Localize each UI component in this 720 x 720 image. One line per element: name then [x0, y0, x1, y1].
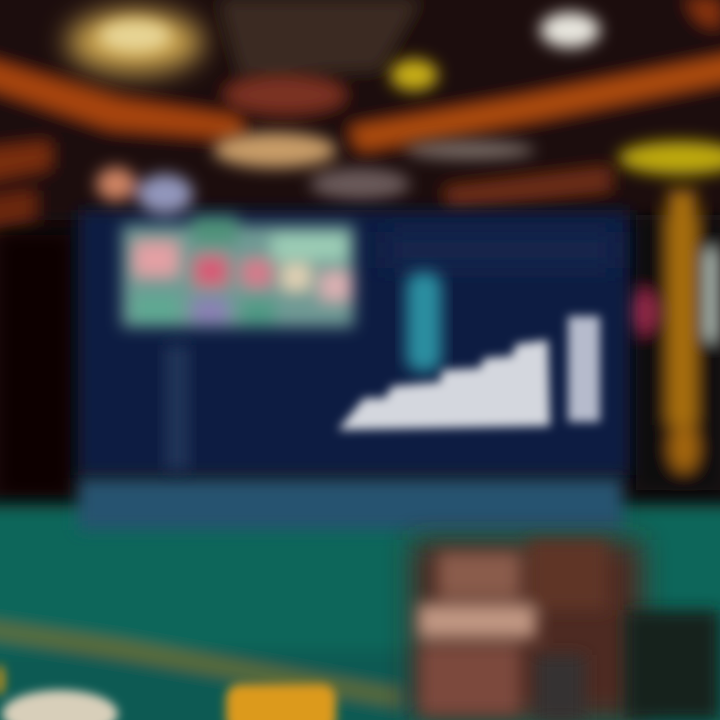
floor — [0, 505, 720, 720]
colored table — [96, 167, 354, 327]
brown boxes — [412, 540, 642, 720]
right pillar and sign — [618, 141, 720, 490]
left dark wall — [0, 235, 70, 495]
vertical strip — [165, 345, 189, 470]
ceiling — [0, 0, 720, 232]
ceiling beams — [0, 58, 240, 138]
panel footer band — [78, 478, 623, 530]
ceiling lights — [67, 10, 203, 74]
teal bar — [406, 272, 442, 372]
white bar chart — [338, 316, 600, 430]
panel: navy display board — [78, 210, 630, 530]
bottom items — [0, 664, 336, 720]
upper right faint rows — [385, 232, 615, 268]
